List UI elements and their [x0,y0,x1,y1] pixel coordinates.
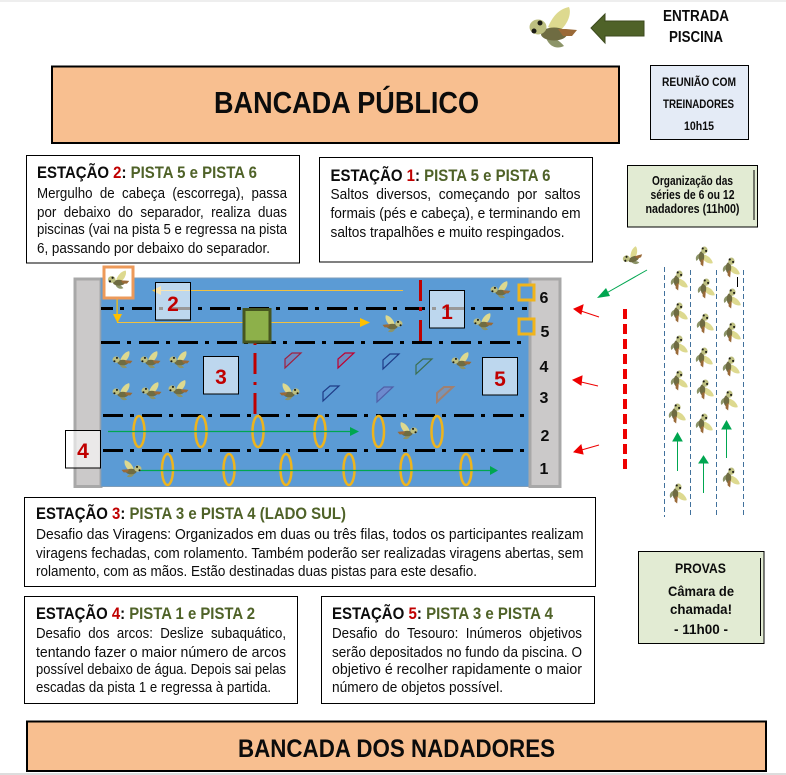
heading: swimmers stands: BANCADA DOS NADADORES [238,735,555,763]
callout: heats call room [638,552,764,644]
label: pool entrance [663,8,729,46]
right deck with lane numbers: 1 [540,461,549,478]
station marker 5 [482,358,518,395]
panel: station 5: ESTAÇÃO 5: PISTA 3 e PISTA 4 [332,603,554,623]
left deck [75,279,101,486]
panel: station 5 [322,596,594,704]
panel: station 1: Saltos diversos, começando por saltos [330,187,580,203]
arrow: pointing to entrance [591,14,644,43]
panel: station 2: ESTAÇÃO 2: PISTA 5 e PISTA 6 [37,162,257,182]
turtles queueing [669,247,741,504]
panel: station 3 [24,498,596,586]
callout: heats organisation [628,166,758,227]
hoops lane 1 [162,454,472,485]
panel: station 3: ESTAÇÃO 3: PISTA 3 e PISTA 4 (LADO SUL) [36,503,346,523]
station marker 1 [430,290,464,328]
hoops lane 2 [134,416,442,447]
panel: station 5: objetivo é recolher rapidamente o maior [332,662,582,678]
callout: coaches meeting: TREINADORES [663,97,734,111]
heading: swimmers stands [27,722,766,771]
callout: heats call room: chamada! [670,602,732,617]
icon: turtle at pool entrance [530,7,577,47]
panel: station 2: 6, passando por debaixo do separador. [37,241,270,257]
panel: station 3: rolamento, com as mãos. Estão destinadas duas pistas para este desafio. [36,564,477,580]
panel: station 2: Mergulho de cabeça (escorrega), passa [37,186,288,202]
panel: station 1: formais (pés e cabeça), e terminando em [330,206,580,222]
right deck with lane numbers: 3 [540,390,549,407]
station marker 3: 3 [215,366,227,389]
station marker 1: 1 [441,301,453,324]
panel: station 4 [24,596,298,704]
callout: heats organisation: séries de 6 ou 12 [650,188,735,202]
panel: station 4: escadas da pista 1 e regressa à partida. [36,680,271,696]
right deck with lane numbers: 6 [540,290,549,307]
right deck with lane numbers: 2 [541,428,550,445]
arrows: green upward [673,421,731,493]
panel: station 5: serão depositados no fundo da piscina. O [332,645,582,661]
panel: station 2 [26,156,300,263]
green route arrows [108,427,498,475]
callout: coaches meeting: REUNIÃO COM [662,74,736,89]
panel: station 2: por debaixo do separador, realiza duas [37,205,287,221]
callout: heats organisation: Organização das [652,174,733,188]
panel: station 4: possível debaixo de água. Depois sai pelas [36,662,286,678]
callout: coaches meeting: 10h15 [684,119,714,133]
panel: station 4: tentando fazer o maior número de arcos [36,645,286,661]
lane exit squares [519,285,534,334]
callout: heats call room: PROVAS [675,561,726,576]
panel: station 4: ESTAÇÃO 4: PISTA 1 e PISTA 2 [36,603,255,623]
station marker 2 [156,282,190,320]
panel: station 5: número de objetos possível. [332,680,503,696]
panel: station 2: piscinas (vai na pista 5 e regressa na pista [37,222,288,238]
red barrier [623,309,627,470]
treasure objects [285,353,453,402]
callout: heats call room: - 11h00 - [674,622,728,637]
panel: station 5: Desafio do Tesouro: Inúmeros objetivos [332,626,582,642]
station marker 3 [204,356,238,394]
red divider south [254,342,256,414]
callout: coaches meeting [650,66,748,140]
start block with turtle [104,267,133,298]
heading: public stands: BANCADA PÚBLICO [214,84,479,120]
red divider north [419,280,422,341]
turtles in pool [113,281,511,477]
diagram: queue area [573,245,744,517]
panel: station 3: viragens fechadas, com rolamento. Também poderão ser realizadas viragens abertas, sem [36,546,584,562]
station marker 4 [66,430,100,468]
callout: heats call room: Câmara de [668,584,734,599]
arrow: to pool [597,270,647,298]
panel: station 1 [320,158,592,262]
callout: heats organisation: nadadores (11h00) [646,202,740,216]
separator block [244,310,270,342]
station marker 4: 4 [77,440,89,463]
station marker 5: 5 [494,368,506,391]
arrows: red toward pool [573,305,599,454]
panel: station 1: saltos trapalhões e muito respingados. [330,225,564,241]
pool water [101,278,529,486]
heading: public stands [52,66,619,143]
label: pool entrance: ENTRADA [663,8,729,25]
label: pool entrance: PISCINA [669,29,723,46]
right deck with lane numbers: 5 [541,324,550,341]
panel: station 1: ESTAÇÃO 1: PISTA 5 e PISTA 6 [330,165,550,185]
station marker 2: 2 [167,293,179,316]
right deck with lane numbers [530,279,560,486]
panel: station 3: Desafio das Viragens: Organizados em duas ou três filas, todos os participantes realizam [36,527,584,543]
right deck with lane numbers: 4 [540,359,549,376]
chart: pool diagram [66,267,560,486]
queue lane dashes [664,267,744,517]
yellow route lines [117,290,403,322]
turtle leaving the queue [620,245,645,268]
panel: station 4: Desafio dos arcos: Deslize subaquático, [36,626,286,642]
